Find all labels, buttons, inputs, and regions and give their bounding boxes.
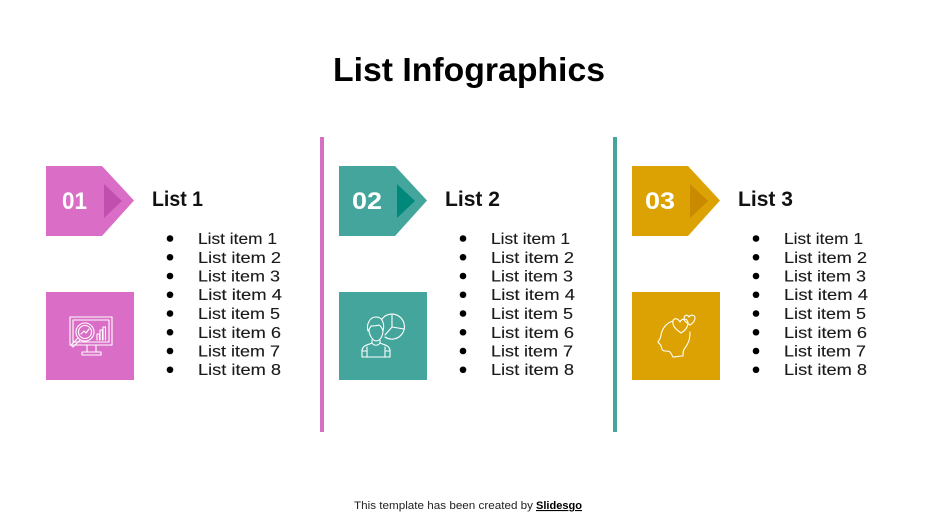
badge 02: 02 [352, 188, 382, 215]
list items: List item 8 [198, 362, 281, 379]
badge 01: 01 [62, 188, 87, 215]
list items: List item 1 [491, 231, 570, 248]
list items: List item 2 [491, 250, 574, 267]
list items: List item 4 [784, 287, 868, 304]
heading: List 1 [152, 188, 203, 211]
list items: List item 7 [198, 344, 280, 360]
list items [753, 231, 868, 379]
badge 02 [339, 166, 427, 236]
list items: List item 1 [784, 231, 863, 248]
divider: teal [613, 137, 617, 432]
list items: List item 4 [198, 287, 282, 304]
badge 03 [632, 166, 720, 236]
list items: List item 2 [198, 250, 281, 267]
list items: List item 4 [491, 287, 575, 304]
list items: List item 8 [784, 362, 867, 379]
heading: List 3 [738, 188, 793, 211]
list items [460, 231, 575, 379]
title: List Infographics [333, 51, 605, 88]
list items: List item 6 [198, 325, 281, 342]
divider: pink [320, 137, 324, 432]
list items: List item 6 [784, 325, 867, 342]
badge 03: 03 [645, 188, 675, 215]
icon: person with pie chart [339, 292, 427, 380]
icon: head with hearts [632, 292, 720, 380]
list items: List item 3 [784, 268, 866, 286]
list items: List item 8 [491, 362, 574, 379]
list items: List item 2 [784, 250, 867, 267]
panel: list 3 [632, 166, 868, 380]
list items: List item 5 [784, 306, 866, 323]
list items: List item 7 [784, 344, 866, 360]
list items: List item 3 [491, 268, 573, 286]
footer credit: Slidesgo [536, 500, 582, 512]
list items: List item 5 [198, 306, 280, 323]
panel: list 1 [46, 166, 282, 380]
list items: List item 6 [491, 325, 574, 342]
footer credit: This template has been created by [354, 500, 534, 512]
list items: List item 3 [198, 268, 280, 286]
list items: List item 7 [491, 344, 573, 360]
badge 01 [46, 166, 134, 236]
panel: list 2 [339, 166, 575, 380]
list items: List item 5 [491, 306, 573, 323]
list items [167, 231, 282, 379]
heading: List 2 [445, 188, 500, 211]
icon: monitor with magnifier and chart [46, 292, 134, 380]
list items: List item 1 [198, 231, 277, 248]
